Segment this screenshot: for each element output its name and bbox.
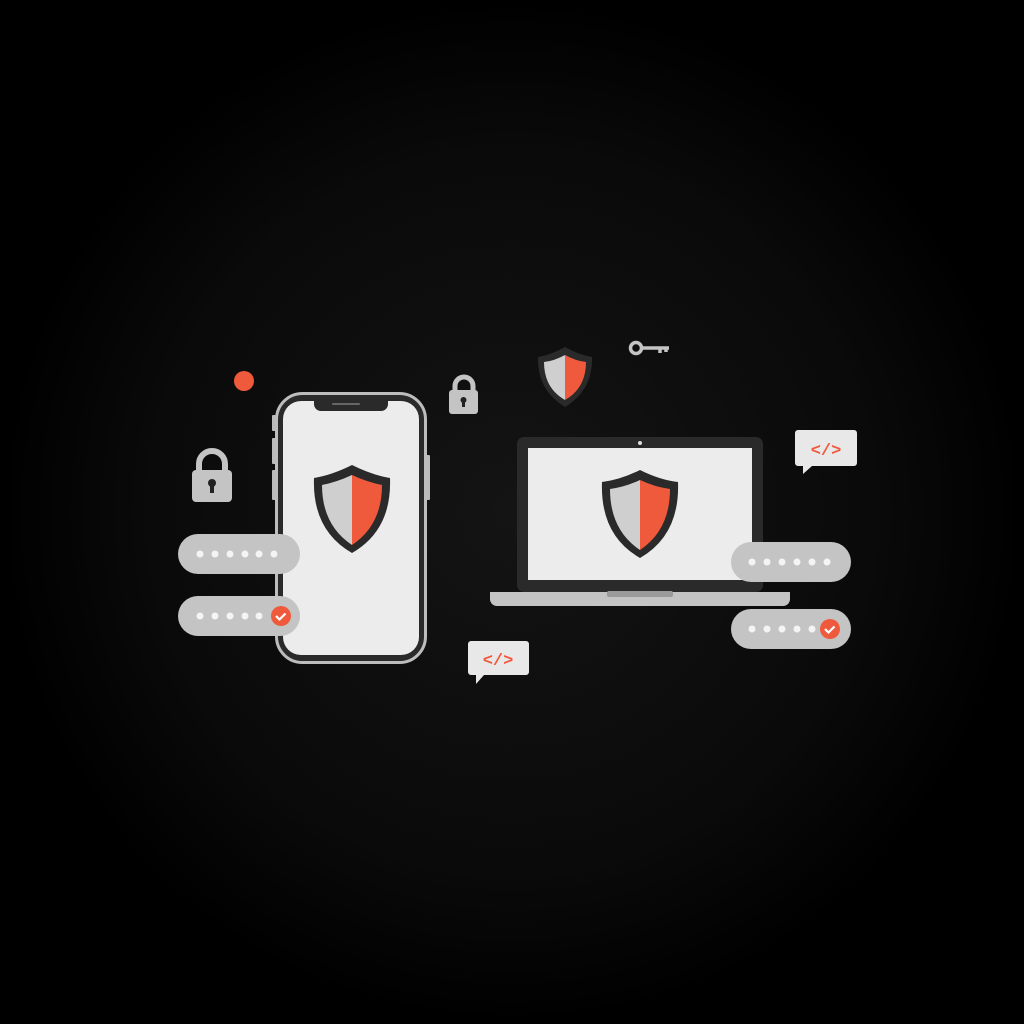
- laptop: [490, 437, 790, 606]
- phone: [272, 394, 430, 662]
- password field right 2: [731, 609, 851, 649]
- password field left 1: [178, 534, 300, 574]
- password field right 1: [731, 542, 851, 582]
- icon: key: [630, 342, 669, 354]
- notch: [314, 401, 388, 411]
- code bubble bottom: </>: [483, 652, 513, 671]
- icon: orange dot: [234, 371, 254, 391]
- code bubble right: </>: [811, 442, 841, 461]
- code bubble bottom: [468, 641, 529, 684]
- icon: phone shield: [314, 465, 390, 553]
- icon: top shield: [538, 347, 592, 407]
- icon: laptop shield: [602, 470, 678, 558]
- password field left 2: [178, 596, 300, 636]
- icon: lock top: [449, 377, 478, 414]
- code bubble right: [795, 430, 857, 474]
- icon: lock left: [192, 451, 232, 502]
